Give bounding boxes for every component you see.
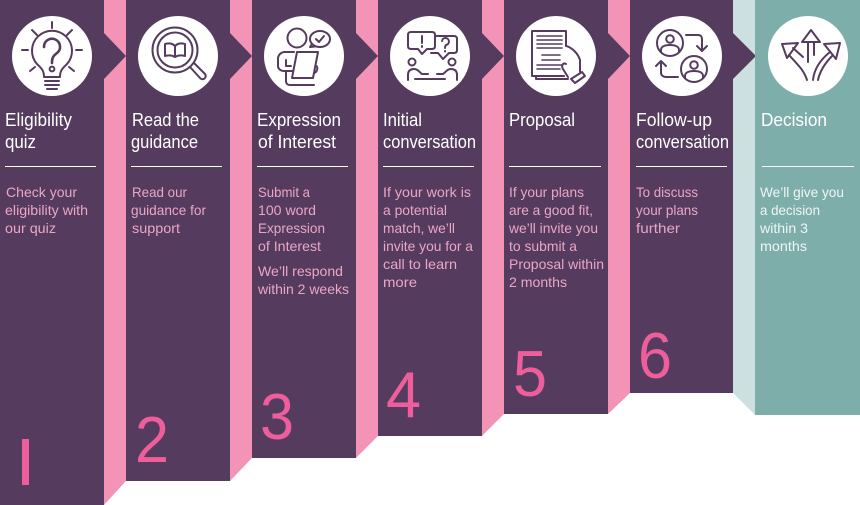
heading: read the guidance: Read the — [132, 109, 199, 130]
text: step 2 description — [131, 184, 206, 236]
text: step 4 description: invite you for a — [383, 238, 473, 254]
text: step 1 description: eligibility with — [5, 202, 88, 218]
text: step 5 description: to submit a — [509, 238, 577, 254]
text: step 6 description: further — [636, 220, 680, 236]
text: step 4 description: more — [383, 274, 417, 290]
text: step 7 description: We’ll give you — [760, 184, 844, 200]
text: step 5 description: Proposal within — [509, 256, 604, 272]
text: step 5 description: If your plans — [509, 184, 584, 200]
text: step 6 description: your plans — [636, 202, 698, 218]
icon: two people in conversation — [408, 32, 457, 80]
text: step 7 description: within 3 — [759, 220, 808, 236]
step 5 panel — [504, 0, 630, 414]
text: step 3 description — [257, 184, 349, 297]
heading: initial conversation — [383, 109, 476, 152]
text: step 2 description: guidance for — [131, 202, 206, 218]
step 3 panel — [252, 0, 378, 458]
text: step 2 description: Read our — [132, 184, 187, 200]
text: step 5 description: are a good fit, — [509, 202, 593, 218]
number 3: 3 — [260, 380, 294, 453]
heading: eligibility quiz: Eligibility — [5, 109, 73, 130]
icon: branching arrows — [782, 30, 840, 80]
heading: decision: Decision — [761, 109, 827, 130]
text: step 3 description: We’ll respond — [258, 263, 343, 279]
step 4 panel — [378, 0, 504, 436]
text: step 4 description — [383, 184, 473, 290]
heading: follow-up conversation: Follow-up — [636, 109, 712, 130]
text: step 3 description: of Interest — [258, 238, 321, 254]
heading: read the guidance: guidance — [131, 131, 198, 152]
text: step 2 description: support — [132, 220, 180, 236]
text: step 4 description: match, we’ll — [383, 220, 455, 236]
number 1: 1 — [6, 426, 42, 499]
text: step 4 description: a potential — [383, 202, 447, 218]
heading: follow-up conversation — [636, 109, 729, 152]
heading: read the guidance — [131, 109, 199, 152]
step 7 panel — [755, 0, 860, 415]
text: step 3 description: 100 word — [258, 202, 316, 218]
text: step 6 description: To discuss — [636, 184, 698, 200]
heading: follow-up conversation: conversation — [636, 131, 729, 152]
text: step 1 description: our quiz — [5, 220, 56, 236]
icon: magnifier with book — [152, 28, 206, 79]
heading: proposal: Proposal — [509, 109, 575, 130]
text: step 6 description — [636, 184, 698, 236]
text: step 5 description: we’ll invite you — [508, 220, 598, 236]
heading: eligibility quiz: quiz — [5, 131, 36, 152]
text: step 7 description: a decision — [760, 202, 820, 218]
text: step 7 description: months — [760, 238, 807, 254]
number 5: 5 — [513, 337, 547, 410]
heading: expression of interest: of Interest — [258, 131, 336, 152]
number 4: 4 — [386, 358, 421, 431]
text: step 5 description — [508, 184, 604, 290]
text: step 4 description: If your work is — [383, 184, 471, 200]
icon: person with tablet and speech bubble — [278, 28, 330, 85]
text: step 1 description — [5, 184, 88, 236]
text: step 1 description: Check your — [6, 184, 77, 200]
text: step 5 description: 2 months — [509, 274, 567, 290]
text: step 3 description: Expression — [258, 220, 325, 236]
heading: expression of interest: Expression — [257, 109, 341, 130]
step 1 panel — [0, 0, 126, 505]
heading: initial conversation: conversation — [383, 131, 476, 152]
step 6 panel — [630, 0, 756, 415]
icon: lightbulb with question mark — [22, 22, 82, 89]
number 6: 6 — [638, 319, 672, 392]
text: step 3 description: Submit a — [258, 184, 310, 200]
heading: eligibility quiz — [5, 109, 73, 152]
text: step 7 description — [759, 184, 844, 254]
number 1 — [22, 439, 29, 485]
text: step 4 description: call to learn — [383, 256, 457, 272]
icon: two people exchanging arrows — [656, 30, 707, 82]
step 2 panel — [126, 0, 252, 481]
number 2: 2 — [135, 403, 169, 476]
heading: expression of interest — [257, 109, 341, 152]
icon: hand holding document — [532, 31, 585, 83]
heading: initial conversation: Initial — [383, 109, 422, 130]
text: step 3 description: within 2 weeks — [257, 281, 349, 297]
